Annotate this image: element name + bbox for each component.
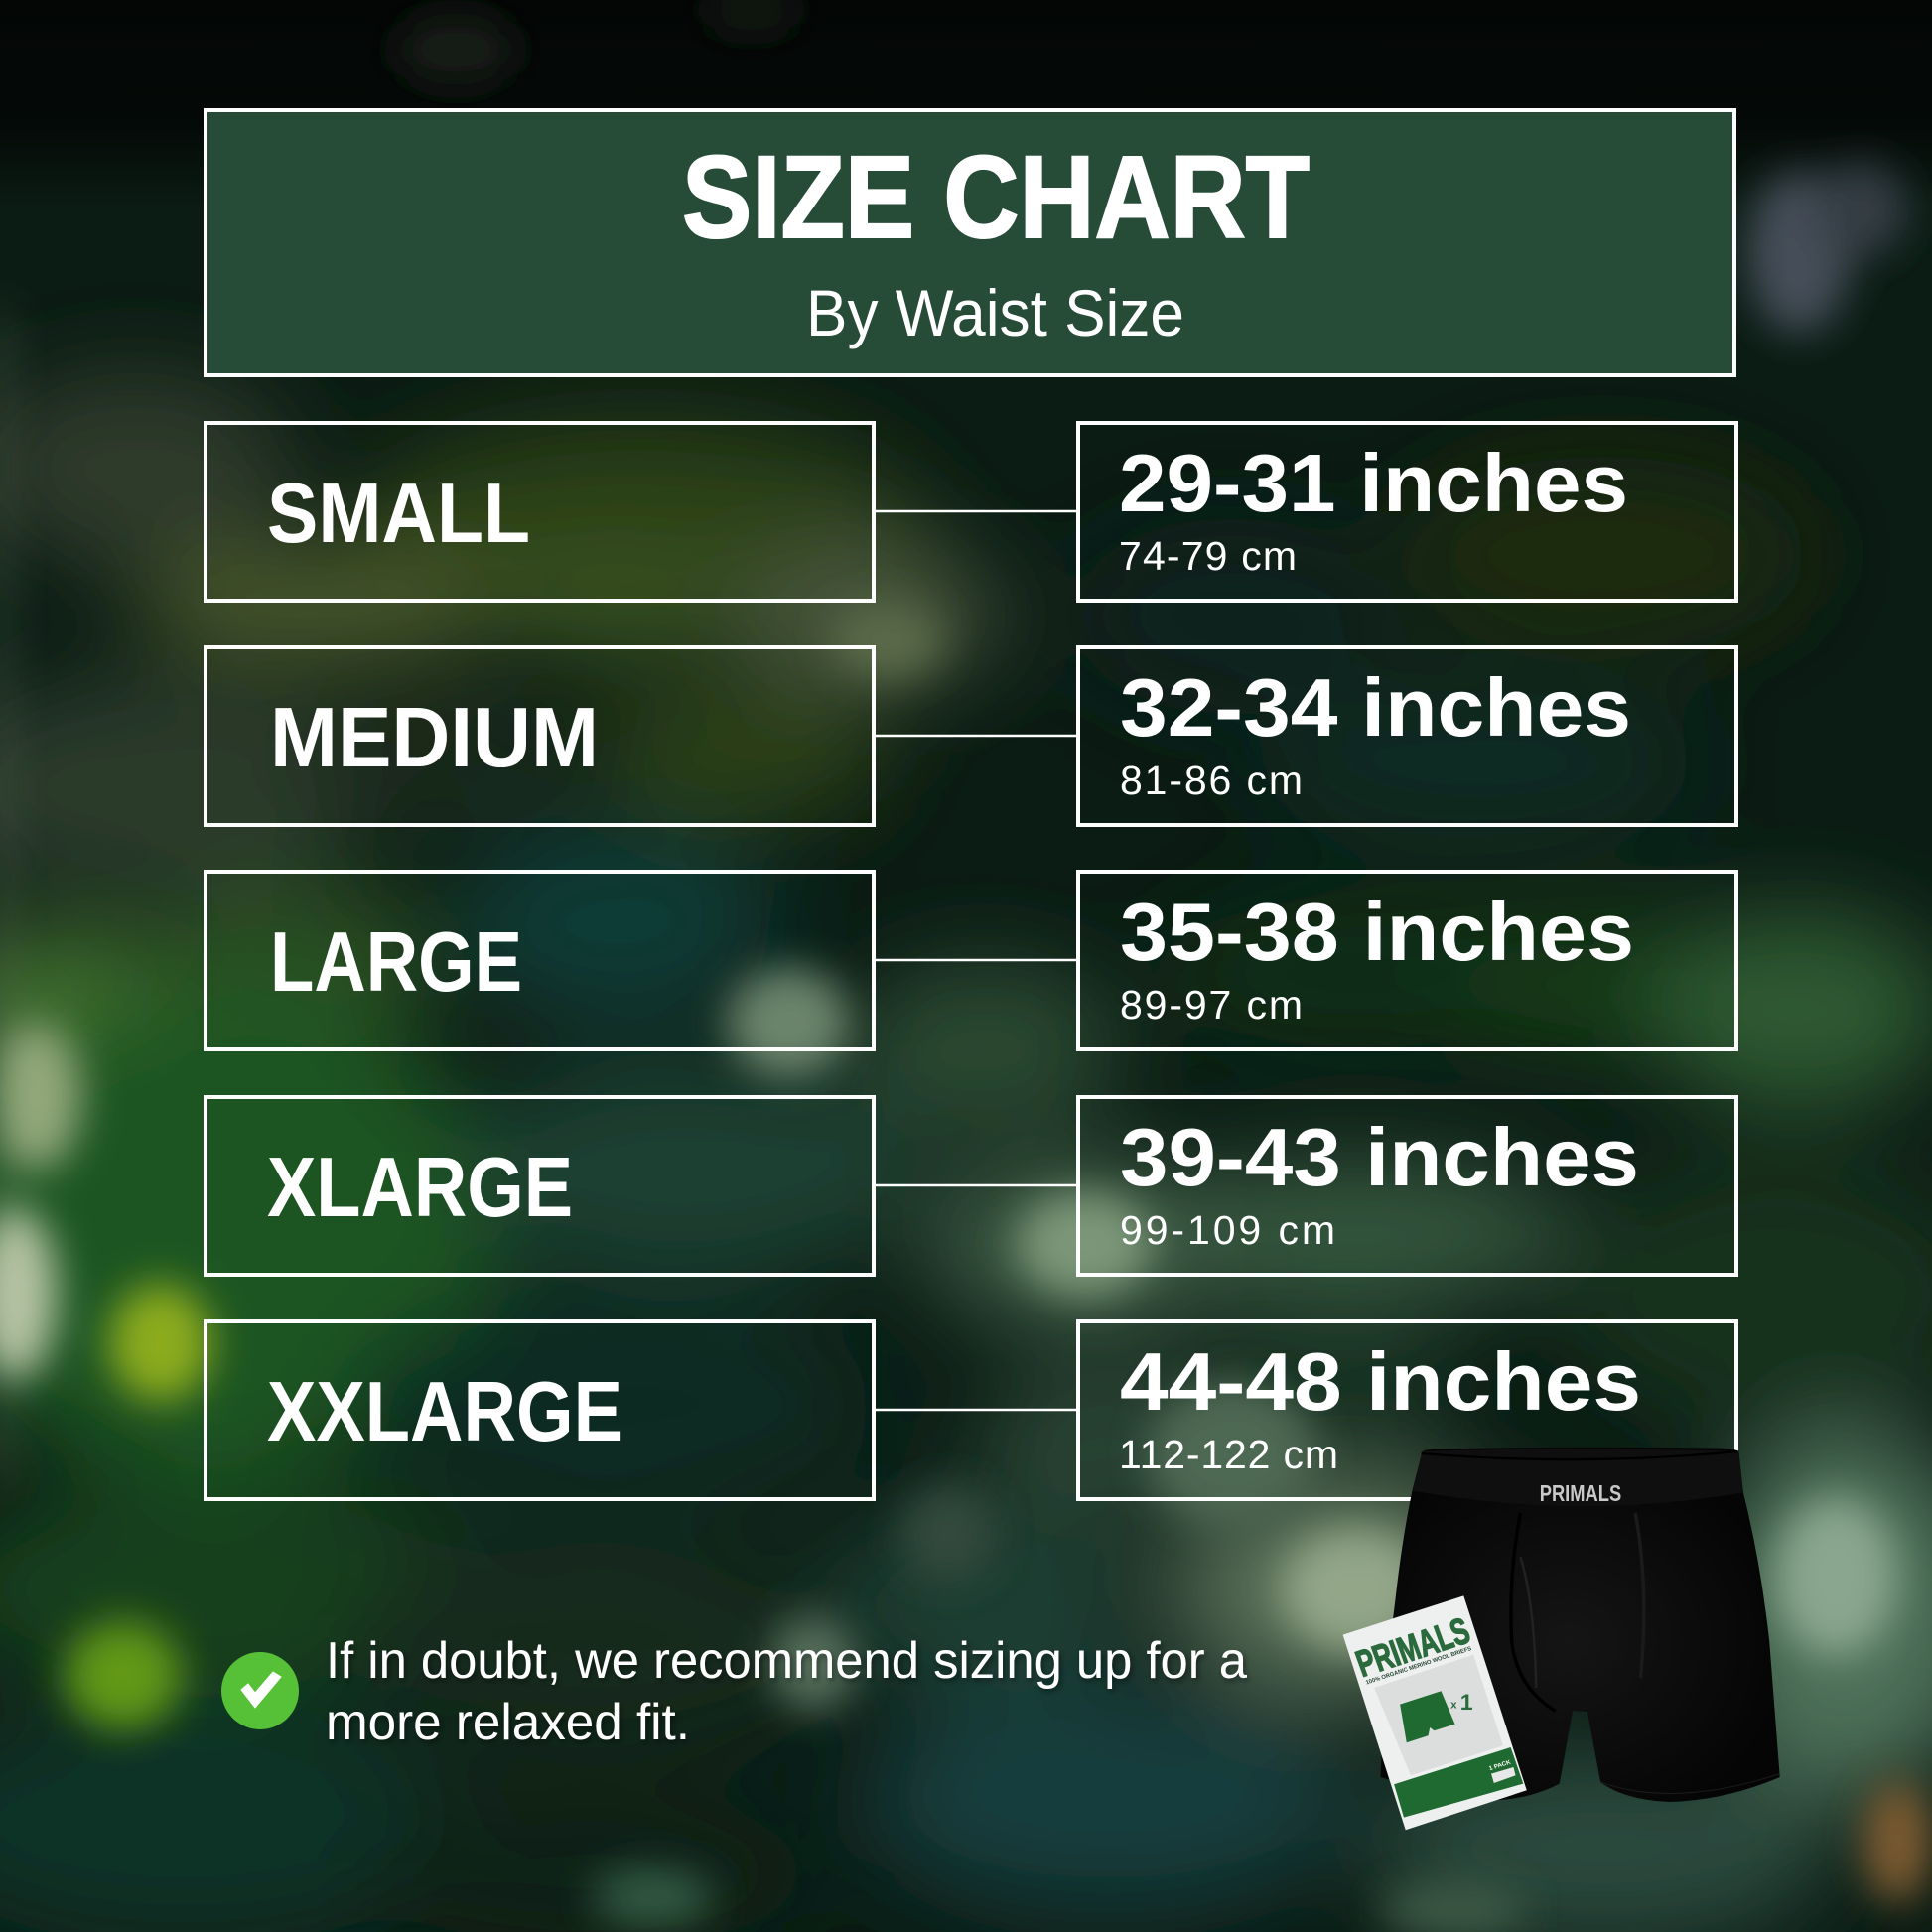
label box: large [206,872,874,1049]
label box: large: LARGE [270,915,522,1010]
label box: xlarge [206,1097,874,1275]
product: primals merino packaging: x [1450,1700,1457,1712]
label box: small: SMALL [267,467,530,561]
connector line [875,1409,1077,1411]
value box: small [1078,423,1736,601]
sizing recommendation note: If in doubt, we recommend sizing up for a [326,1632,1247,1690]
label box: xlarge: XLARGE [267,1141,573,1235]
title: SIZE CHART [682,132,1310,263]
label box: small [206,423,874,601]
waistband logo: PRIMALS [1540,1481,1621,1507]
packaging shorts icon [1400,1691,1455,1742]
connector line [875,510,1077,512]
sizing recommendation note [326,1632,1247,1751]
product: primals merino packaging [1343,1595,1527,1830]
icon: green check circle [221,1652,299,1729]
size row: small [206,423,1736,601]
subtitle: By Waist Size [806,276,1184,349]
header panel: size chart title [206,110,1734,375]
product: black boxer briefs [1380,1448,1780,1802]
size row: large [206,872,1736,1049]
label box: xxlarge [206,1321,874,1499]
value box: medium: 81-86 cm [1120,758,1303,803]
product: primals merino packaging: 1 PACK [1488,1759,1512,1772]
product: primals merino packaging: 1 [1460,1690,1473,1715]
size row: xlarge [206,1097,1736,1275]
label box: medium: MEDIUM [270,691,599,785]
value box: xxlarge [1078,1321,1736,1499]
top dark band [0,0,1932,208]
size row: medium [206,647,1736,825]
value box: medium: 32-34 inches [1120,661,1631,754]
connector line [875,735,1077,737]
value box: medium [1078,647,1736,825]
value box: xlarge [1078,1097,1736,1275]
label box: xxlarge: XXLARGE [267,1365,622,1459]
size row: xxlarge [206,1321,1736,1499]
label box: medium [206,647,874,825]
connector line [875,1184,1077,1186]
packaging logo: PRIMALS [1351,1610,1475,1686]
value box: small: 29-31 inches [1119,437,1628,529]
value box: xlarge: 99-109 cm [1120,1207,1335,1253]
product: primals merino packaging: 100% ORGANIC MERINO WOOL BRIEFS [1365,1645,1472,1686]
value box: small: 74-79 cm [1119,533,1297,579]
value box: xxlarge: 44-48 inches [1120,1335,1641,1428]
value box: large: 35-38 inches [1120,886,1634,978]
connector line [875,959,1077,961]
value box: xlarge: 39-43 inches [1120,1111,1639,1203]
value box: large [1078,872,1736,1049]
sizing recommendation note: more relaxed fit. [326,1694,690,1751]
value box: xxlarge: 112-122 cm [1119,1432,1338,1477]
value box: large: 89-97 cm [1120,982,1303,1028]
packaging green band [1394,1747,1523,1818]
